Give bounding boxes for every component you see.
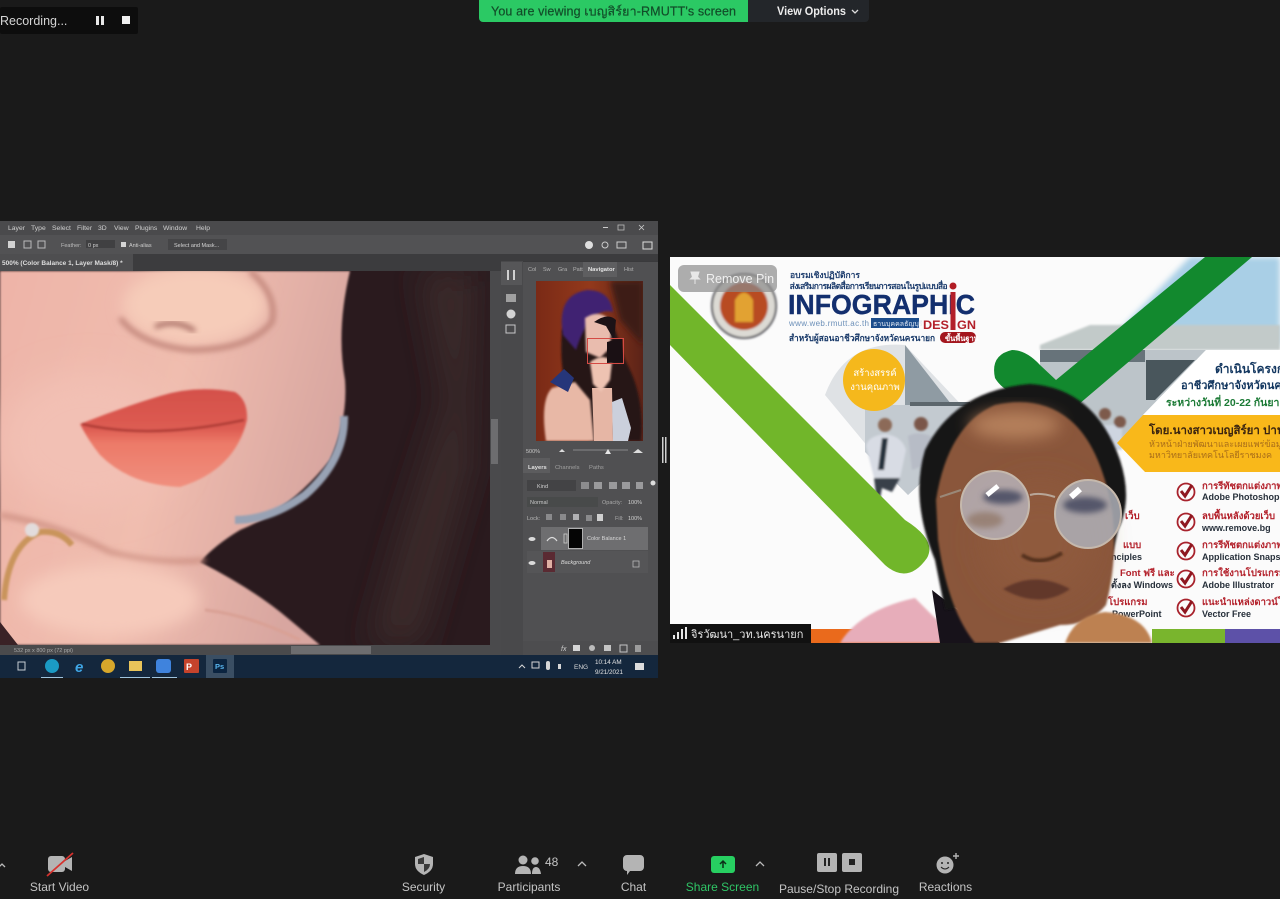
layer: background <box>527 551 648 573</box>
icon: edge <box>45 659 59 673</box>
status bar text: 532 px x 800 px (72 ppi) <box>14 648 73 654</box>
poster title: DES <box>923 318 949 332</box>
poster title: สำหรับผู้สอนอาชีวศึกษาจังหวัดนครนายก <box>789 333 935 344</box>
poster checklist: nciples <box>1111 552 1142 562</box>
document tab <box>0 254 658 271</box>
document tab: 500% (Color Balance 1, Layer Mask/8) * <box>2 260 123 267</box>
chat <box>621 855 647 894</box>
poster title: อบรมเชิงปฏิบัติการ <box>790 270 860 280</box>
thumbnail face <box>585 314 612 358</box>
canvas: zoomed face photo <box>0 267 490 645</box>
layer: color balance: Color Balance 1 <box>587 536 626 542</box>
lips <box>80 389 247 487</box>
security <box>402 854 445 894</box>
nose and mouth <box>1022 553 1062 561</box>
menu bar: 3D <box>98 225 107 232</box>
pause stop recording: Pause/Stop Recording <box>779 882 899 896</box>
chin shadow <box>0 515 205 561</box>
poster checklist: โปรแกรม <box>1107 596 1147 608</box>
dark green check stripe <box>994 257 1252 403</box>
panel: layers: Opacity: <box>602 500 623 506</box>
poster checklist: www.remove.bg <box>1201 523 1271 533</box>
hand <box>1065 612 1152 643</box>
viewing banner: You are viewing เบญสิร์ยา-RMUTT's screen <box>491 4 736 18</box>
earring hoop <box>235 416 344 520</box>
icon: powerpoint <box>184 659 199 673</box>
poster checklist: Adobe Photoshop <box>1202 492 1280 502</box>
options bar <box>0 235 658 254</box>
layer: background: Background <box>561 560 591 566</box>
yellow presenter band: หัวหน้าฝ่ายพัฒนาและเผยแพร่ข้อมู <box>1149 439 1280 450</box>
poster title: ธานบุคคลธัญบุรี <box>873 320 923 328</box>
panel: navigator: Gra <box>558 267 568 273</box>
poster title: www.web.rmutt.ac.th <box>788 319 869 328</box>
presenter <box>840 384 1152 643</box>
icon: photoshop <box>206 655 234 678</box>
menu bar: Layer <box>8 225 26 232</box>
options bar: Feather: <box>61 243 82 249</box>
menu bar: Type <box>31 225 46 232</box>
panel: navigator: Patt <box>573 267 583 273</box>
poster title: ขั้นพื้นฐาน <box>945 332 980 344</box>
navigator thumbnail <box>536 281 643 441</box>
icon: internet explorer: e <box>75 659 83 676</box>
thumbnail dress <box>612 398 631 441</box>
options bar: 0 px <box>88 243 99 249</box>
poster title: ส่งเสริมการผลิตสื่อการเรียนการสอนในรูปแบบสื่อ <box>790 279 948 292</box>
poster checklist: Font ฟรี และ <box>1120 567 1175 579</box>
remove pin button <box>678 265 777 292</box>
thumbnail chest <box>592 388 613 441</box>
poster checklist: แบบ <box>1123 540 1141 551</box>
chat: Chat <box>621 880 647 894</box>
viewing banner <box>479 0 748 22</box>
menu bar: Window <box>163 225 187 232</box>
panel: layers: Layers <box>528 465 547 471</box>
panel: layers: Kind <box>537 484 548 490</box>
poster background: building and sky <box>825 257 1280 495</box>
poster checklist: PowerPoint <box>1112 609 1162 619</box>
poster people <box>866 406 1128 497</box>
poster grey circle <box>825 344 958 443</box>
poster headline right <box>1166 361 1280 409</box>
poster checklist: ตั้งลง Windows <box>1111 578 1173 590</box>
thumbnail top strap <box>550 369 574 392</box>
share screen <box>686 856 759 894</box>
view options button <box>748 0 869 22</box>
menu bar: Select <box>52 225 71 232</box>
windows taskbar: 9/21/2021 <box>595 669 624 676</box>
poster bottom colour strip <box>810 629 1280 643</box>
hand <box>0 523 300 645</box>
icon: zoom <box>156 659 171 673</box>
remove pin button: Remove Pin <box>706 272 774 286</box>
participants: 48 <box>545 855 559 869</box>
poster checklist: ลบพื้นหลังด้วยเว็บ <box>1202 508 1275 522</box>
splitter handle <box>662 437 666 463</box>
thumbnail shoulder <box>544 382 594 441</box>
panel: layers: Fill: <box>615 516 624 522</box>
recording indicator: Recording... <box>0 14 67 28</box>
pause stop recording <box>779 853 899 896</box>
hair <box>370 271 475 645</box>
menu bar: Plugins <box>135 225 158 232</box>
bottom toolbar <box>0 845 1280 899</box>
poster background: building and sky: สร้างสรรค์ <box>853 367 897 379</box>
windows taskbar: 10:14 AM <box>595 659 622 666</box>
view options button: View Options <box>777 4 846 18</box>
menu bar: Help <box>196 225 210 232</box>
poster background: building and sky: งานคุณภาพ <box>850 382 900 393</box>
icon: file explorer <box>129 661 142 671</box>
start video <box>30 853 89 894</box>
panel: navigator <box>523 261 658 458</box>
windows taskbar: ENG <box>574 664 588 671</box>
panel: layers <box>523 458 658 655</box>
panel: navigator: 500% <box>526 449 540 455</box>
menu bar: Filter <box>77 225 93 232</box>
reactions: Reactions <box>919 880 972 894</box>
yellow presenter band <box>1117 415 1280 472</box>
panel: layers: Channels <box>555 465 580 471</box>
thumbnail hand <box>590 357 612 392</box>
face and hand skin <box>0 271 350 645</box>
poster title: GN <box>957 318 976 332</box>
yellow presenter band: มหาวิทยาลัยเทคโนโลยีราชมงค <box>1149 450 1272 460</box>
video panel: speaker over infographic poster <box>670 257 1280 643</box>
poster checklist: Vector Free <box>1202 609 1251 619</box>
share screen: Share Screen <box>686 880 759 894</box>
participant name tag <box>670 624 811 643</box>
panel: layers: Lock: <box>527 516 541 522</box>
security: Security <box>402 880 445 894</box>
panel: navigator: Navigator <box>588 267 615 273</box>
recording indicator <box>0 7 138 34</box>
participants: Participants <box>498 880 560 894</box>
icon: chrome <box>101 659 115 673</box>
panel: layers: Normal <box>530 500 548 506</box>
menu bar: View <box>114 225 129 232</box>
start video: Start Video <box>30 880 89 894</box>
reactions <box>919 853 972 894</box>
emblem <box>712 274 776 338</box>
panel: layers: fx <box>561 646 567 653</box>
poster checklist: Adobe Illustrator <box>1202 580 1275 590</box>
poster checklist: เว็บ <box>1125 509 1140 522</box>
thumbnail hair <box>561 310 642 441</box>
canvas scrollbars <box>490 271 501 645</box>
light green chevron stripe <box>670 285 929 574</box>
icon: photoshop: Ps <box>215 662 224 671</box>
infographic wordmark: INFOGRAPHIC <box>788 289 975 320</box>
poster checklist <box>1107 480 1280 619</box>
layer: color balance <box>528 527 648 550</box>
glasses <box>940 471 1121 548</box>
panel: layers: Paths <box>589 465 604 471</box>
photoshop window <box>0 221 658 678</box>
panel: layers: 100% <box>628 516 642 522</box>
options bar: Select and Mask... <box>174 243 220 249</box>
menu bar <box>0 221 658 235</box>
nose <box>120 267 273 350</box>
thumbnail hat <box>562 290 613 350</box>
panel: navigator: Sw <box>543 267 551 273</box>
panel: navigator: Col <box>528 267 536 273</box>
windows taskbar <box>0 655 658 678</box>
options bar: Anti-alias <box>129 243 152 249</box>
participant name tag: จิรวัฒนา_วท.นครนายก <box>690 629 803 641</box>
panel: navigator: Hist <box>624 267 634 273</box>
side tools column <box>501 261 523 655</box>
windows taskbar: P <box>186 662 192 672</box>
participants <box>498 855 560 894</box>
poster title <box>712 270 980 344</box>
poster headline right: อาชีวศึกษาจังหวัดนค <box>1181 379 1280 392</box>
panel: layers: 100% <box>628 500 642 506</box>
